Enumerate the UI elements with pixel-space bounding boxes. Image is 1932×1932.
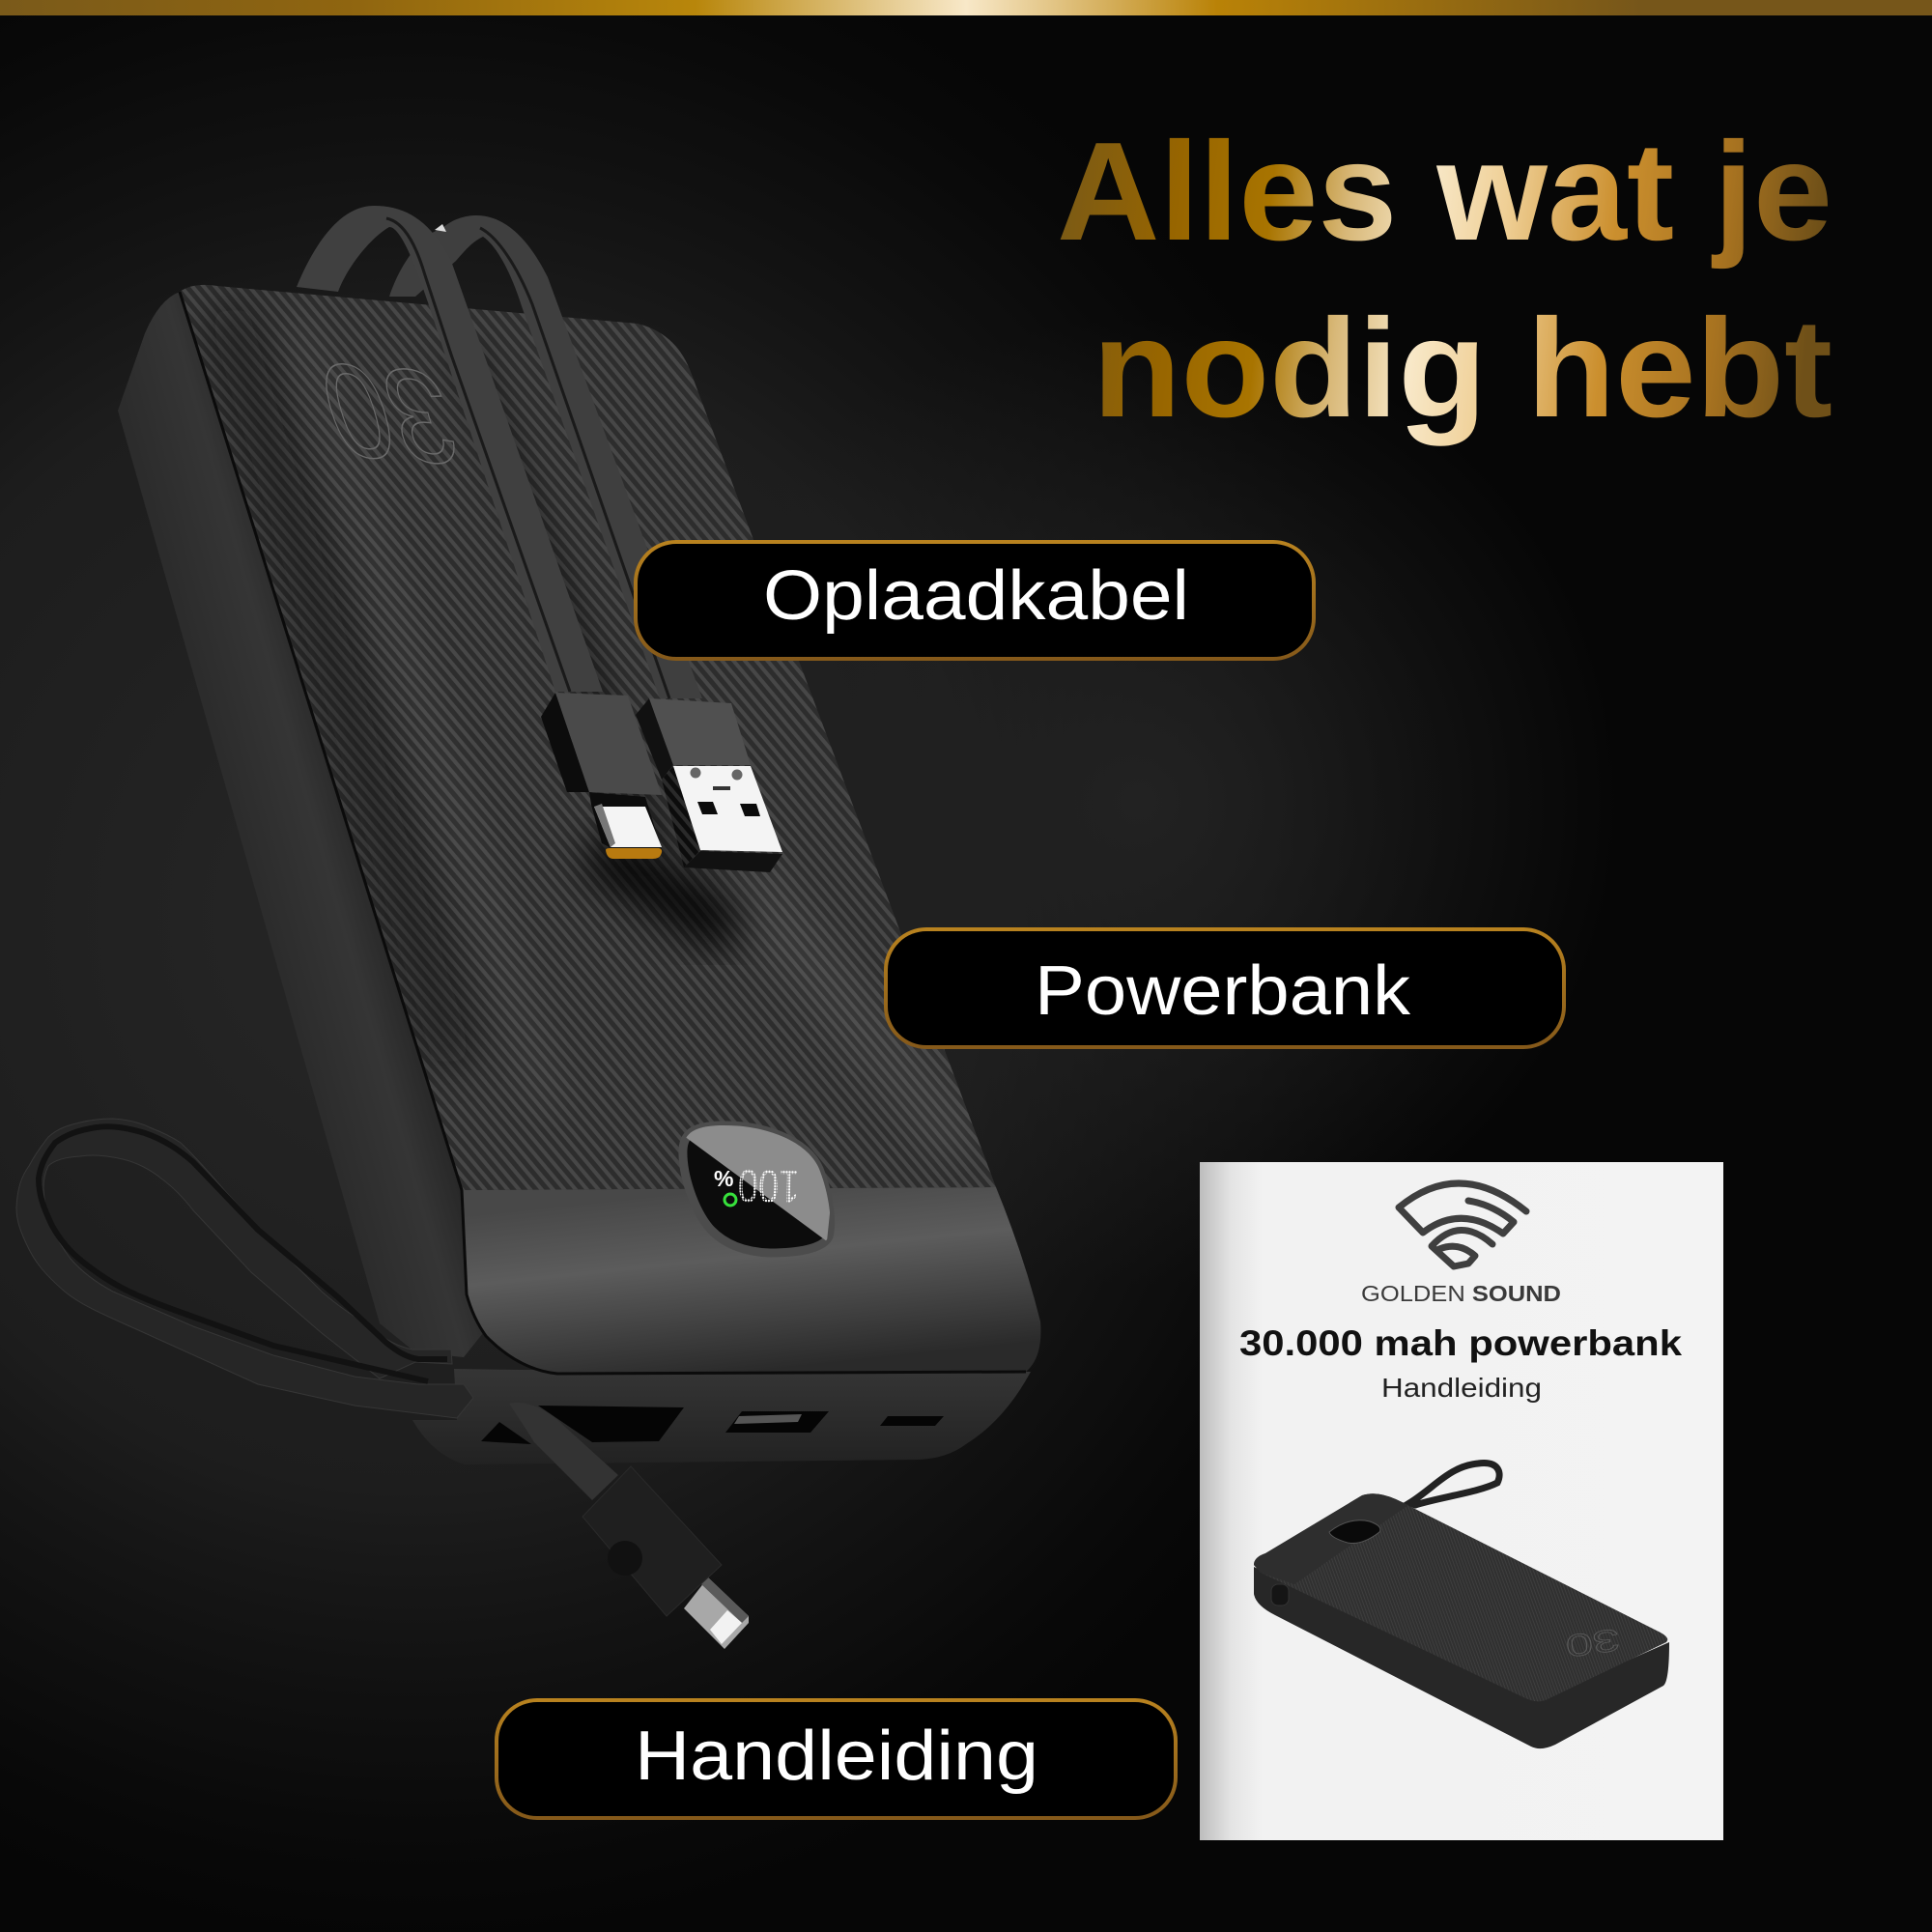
- USB-A connector: [636, 698, 782, 872]
- display: [676, 1111, 840, 1253]
- loop cable: [16, 1119, 473, 1418]
- green charge icon: [724, 1194, 736, 1206]
- brand name: GOLDEN SOUND: [1361, 1281, 1561, 1306]
- manual page: [1200, 1162, 1723, 1840]
- port: cable slot: [481, 1422, 531, 1444]
- lightning connector: [582, 1466, 749, 1649]
- mini end cap: [1254, 1493, 1408, 1584]
- flat cable left: [297, 206, 603, 692]
- port: USB-A: [725, 1411, 829, 1433]
- title: [1057, 113, 1833, 446]
- ports face: [412, 1369, 1031, 1464]
- bottom cap: [462, 1187, 1040, 1374]
- top gold bar: [0, 0, 1932, 15]
- port: cable bay: [538, 1406, 684, 1442]
- edge line between side and top: [180, 292, 1026, 1374]
- pill: Handleiding: [497, 1700, 1176, 1818]
- main powerbank product: [16, 206, 1040, 1649]
- pill: Oplaadkabel: Oplaadkabel: [763, 557, 1189, 635]
- title: nodig hebt: [1093, 290, 1833, 446]
- textured top face: [180, 285, 996, 1190]
- mini body: [1254, 1567, 1669, 1748]
- USB-C connector: [541, 693, 662, 859]
- pill: Handleiding: Handleiding: [635, 1718, 1038, 1795]
- mini powerbank picture: [1254, 1463, 1669, 1748]
- manual booklet: [1200, 1162, 1723, 1840]
- title: Alles wat je: [1057, 113, 1833, 270]
- mini strap: [1409, 1463, 1499, 1505]
- manual subtitle: Handleiding: [1381, 1373, 1542, 1403]
- mini top face: [1254, 1493, 1667, 1701]
- mini display: [1329, 1520, 1380, 1544]
- pill: Oplaadkabel: [636, 542, 1314, 659]
- mini button: [1271, 1584, 1289, 1605]
- display readout: 100: [737, 1159, 800, 1211]
- pill: Powerbank: [886, 929, 1564, 1047]
- port: USB-C: [880, 1416, 944, 1426]
- mini capacity mark: 30: [1564, 1622, 1622, 1664]
- side face: [118, 292, 483, 1357]
- embossed capacity mark: 30: [304, 334, 474, 494]
- lower cable: [509, 1403, 618, 1500]
- manual title: 30.000 mah powerbank: [1239, 1323, 1682, 1363]
- face shading: [227, 309, 966, 1150]
- brand logo: [1399, 1183, 1526, 1266]
- flat cable right: [389, 215, 702, 698]
- pill: Powerbank: Powerbank: [1035, 952, 1411, 1030]
- percent sign: %: [714, 1166, 733, 1191]
